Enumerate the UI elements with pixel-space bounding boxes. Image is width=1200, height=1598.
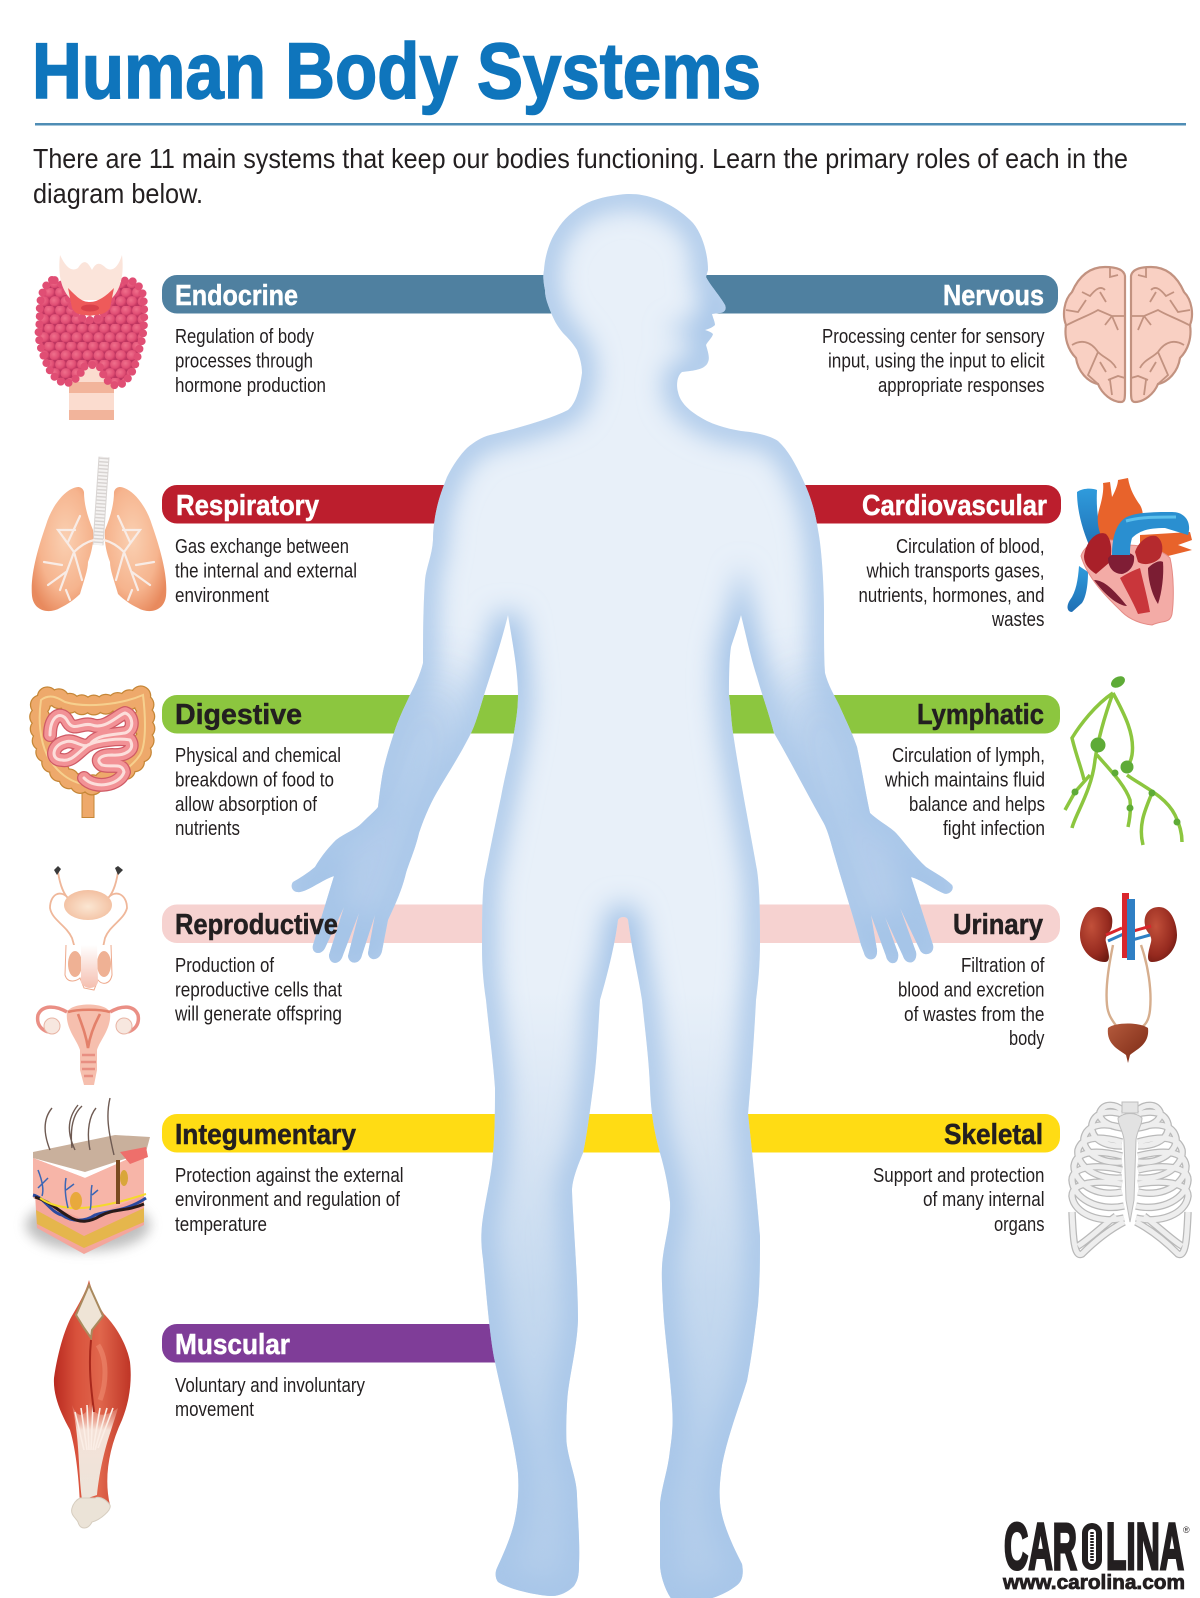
text: muscular description: Voluntary and involuntary <box>175 1374 366 1397</box>
logo: Carolina: www.carolina.com <box>1002 1572 1185 1594</box>
text: digestive description: Physical and chemical <box>175 744 341 767</box>
text: muscular description <box>175 1374 366 1421</box>
text: respiratory description: environment <box>175 584 269 607</box>
human body silhouette <box>270 190 978 1598</box>
text: digestive description: allow absorption of <box>175 793 317 816</box>
bar: digestive and lymphatic <box>162 695 1060 734</box>
bar: endocrine and nervous <box>162 275 1058 314</box>
text: urinary description <box>898 954 1045 1050</box>
heading: Urinary: Urinary <box>953 909 1043 941</box>
logo: Carolina <box>1002 1509 1190 1594</box>
text: muscular description: movement <box>175 1398 254 1421</box>
text: urinary description: body <box>1009 1027 1045 1050</box>
icon: intestines <box>40 695 145 818</box>
icon: reproductive organs <box>38 866 138 1085</box>
text: lymphatic description: Circulation of lymph, <box>892 744 1045 767</box>
text: digestive description <box>175 744 341 840</box>
heading: Digestive: Digestive <box>175 699 302 731</box>
text: cardiovascular description: Circulation of blood, <box>896 535 1044 558</box>
text: reproductive description: Production of <box>175 954 274 977</box>
text: integumentary description: environment and regulation of <box>175 1188 400 1211</box>
title: Human Body Systems <box>32 26 761 115</box>
text: skeletal description: of many internal <box>923 1188 1044 1211</box>
text: urinary description: Filtration of <box>961 954 1045 977</box>
intro text: diagram below. <box>33 178 203 209</box>
text: respiratory description: Gas exchange between <box>175 535 349 558</box>
text: integumentary description: Protection against the external <box>175 1164 404 1187</box>
text: digestive description: breakdown of food to <box>175 768 334 792</box>
male reproductive system <box>50 866 127 990</box>
text: lymphatic description <box>884 744 1045 840</box>
text: cardiovascular description: which transports gases, <box>866 560 1044 582</box>
text: skeletal description <box>873 1164 1044 1236</box>
intro text <box>33 143 1128 209</box>
heading: Lymphatic: Lymphatic <box>917 699 1044 731</box>
bar: integumentary and skeletal <box>162 1114 1060 1152</box>
text: endocrine description: Regulation of body <box>175 325 315 348</box>
text: endocrine description: hormone production <box>175 374 326 397</box>
heading: Reproductive: Reproductive <box>175 909 338 941</box>
heading: Integumentary: Integumentary <box>175 1119 356 1151</box>
icon: lymphatic vessels <box>1065 674 1182 845</box>
text: nervous description: appropriate responses <box>878 374 1044 397</box>
heading: Endocrine: Endocrine <box>175 280 298 312</box>
icon: lungs <box>32 457 166 611</box>
text: digestive description: nutrients <box>175 817 240 840</box>
icon: brain <box>1064 267 1192 402</box>
female reproductive system <box>38 1004 138 1085</box>
heading: Respiratory: Respiratory <box>176 490 319 522</box>
heading: Skeletal: Skeletal <box>944 1119 1043 1151</box>
text: endocrine description: processes through <box>175 350 313 372</box>
text: urinary description: blood and excretion <box>898 978 1044 1002</box>
icon: heart <box>1068 478 1192 625</box>
heading: Muscular: Muscular <box>175 1329 290 1361</box>
text: cardiovascular description <box>858 535 1044 631</box>
text: lymphatic description: which maintains fluid <box>884 768 1045 792</box>
text: lymphatic description: balance and helps <box>909 793 1045 816</box>
text: cardiovascular description: wastes <box>991 608 1044 631</box>
text: skeletal description: Support and protection <box>873 1164 1044 1187</box>
bar: muscular <box>162 1324 522 1362</box>
heading: Nervous: Nervous <box>943 280 1044 312</box>
logo: Carolina: ® <box>1183 1525 1190 1535</box>
text: respiratory description <box>175 535 357 607</box>
icon: muscle <box>54 1280 131 1528</box>
logo: Carolina: CAR <box>1004 1509 1077 1583</box>
text: reproductive description <box>174 954 342 1026</box>
intro text: There are 11 main systems that keep our bodies functioning. Learn the primary roles of each in the <box>33 143 1128 174</box>
text: integumentary description <box>175 1164 404 1236</box>
text: lymphatic description: fight infection <box>943 817 1045 840</box>
text: skeletal description: organs <box>994 1213 1044 1236</box>
text: integumentary description: temperature <box>175 1213 267 1236</box>
bar: respiratory and cardiovascular <box>162 485 1061 524</box>
heading: Cardiovascular: Cardiovascular <box>862 490 1047 522</box>
icon: skin cross-section <box>26 1098 150 1254</box>
bar: reproductive and urinary <box>162 904 1060 943</box>
icon: kidneys and bladder <box>1080 893 1177 1063</box>
text: endocrine description <box>175 325 326 397</box>
text: nervous description: input, using the input to elicit <box>828 350 1045 372</box>
text: cardiovascular description: nutrients, hormones, and <box>858 584 1044 607</box>
icon: rib cage <box>1072 1102 1188 1254</box>
text: nervous description: Processing center for sensory <box>822 325 1045 348</box>
icon: thyroid gland <box>39 255 144 420</box>
text: reproductive description: will generate offspring <box>174 1002 342 1026</box>
text: respiratory description: the internal and external <box>175 560 357 582</box>
text: reproductive description: reproductive cells that <box>175 978 342 1002</box>
text: nervous description <box>822 325 1045 397</box>
text: urinary description: of wastes from the <box>904 1003 1044 1026</box>
